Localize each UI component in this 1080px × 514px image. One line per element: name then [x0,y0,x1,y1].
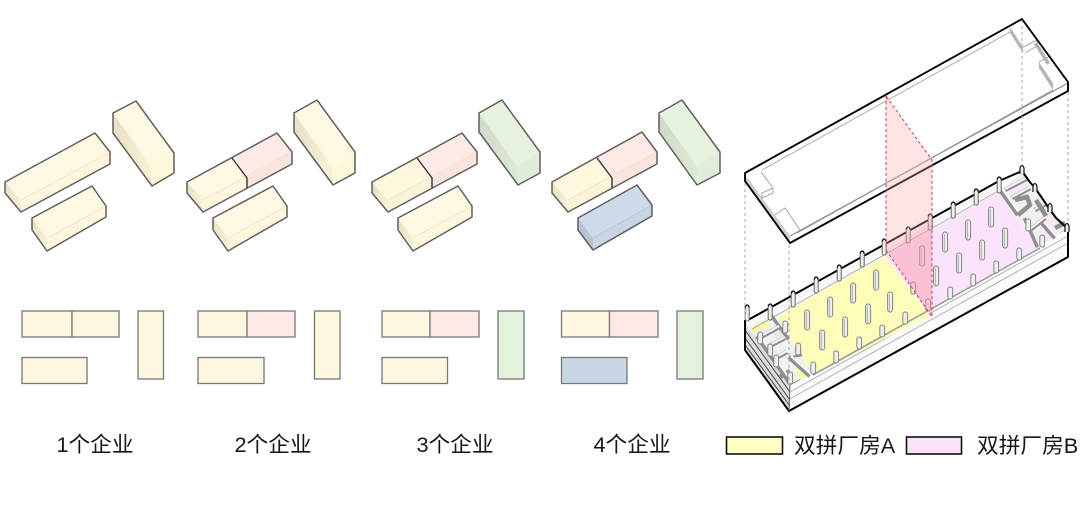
legend: duplex factory A [726,433,896,458]
end rooms right [998,172,1067,248]
label: 3 enterprises: 3个企业 [416,432,494,457]
3D massing: 4 enterprises [552,100,720,250]
end rooms left [748,313,816,384]
3D massing: 1 enterprise [5,101,174,251]
legend: duplex factory B [906,433,1078,458]
floor: duplex factory B (lilac) [885,192,1038,312]
front floor edge shadow [813,248,1040,375]
projection guide lines [745,20,1068,385]
label: 1 enterprise: 1个企业 [56,432,134,457]
roof ledges right [1010,27,1064,90]
plan: 1 enterprise [22,311,164,384]
floor: duplex factory A (yellow) [775,256,930,375]
columns in factory A [796,270,908,363]
label: 4 enterprises: 4个企业 [594,432,671,457]
plan: 2 enterprises [198,311,340,384]
red party-wall plane [886,96,932,317]
plan: 4 enterprises [562,311,703,384]
label: 2 enterprises: 2个企业 [234,432,312,457]
columns in factory B [911,207,1022,311]
back wall with posts [745,166,1069,329]
plan: 3 enterprises [382,311,524,384]
axonometric: building base [745,226,1068,411]
axonometric: roof slab [745,19,1068,243]
legend: duplex factory B: 双拼厂房B [977,433,1078,458]
3D massing: 2 enterprises [187,100,355,251]
roof ledges left [761,172,800,230]
legend: duplex factory A: 双拼厂房A [794,433,896,458]
3D massing: 3 enterprises [372,100,540,251]
